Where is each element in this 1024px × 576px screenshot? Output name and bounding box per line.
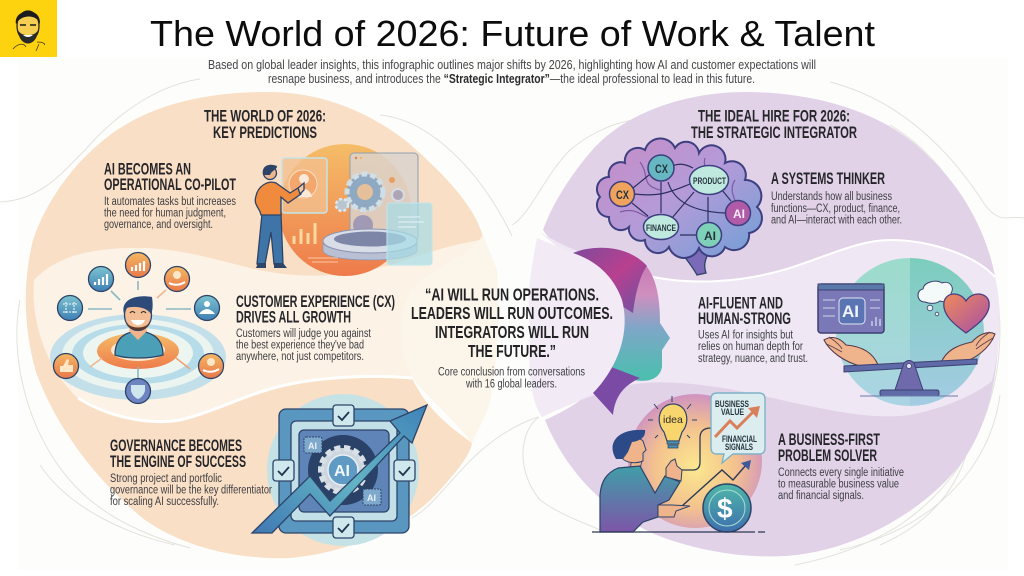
panel: key predictions	[26, 92, 483, 558]
heading: ideal hire: THE IDEAL HIRE FOR 2026:	[698, 108, 850, 126]
title: The World of 2026: Future of Work & Talent	[150, 13, 875, 54]
text block: AI-fluent and human-strong: HUMAN-STRONG	[698, 310, 791, 328]
icon: blue waves	[58, 296, 82, 320]
icon: heart	[944, 294, 989, 333]
icon: orange hand	[164, 266, 190, 292]
figure: smiling customer	[115, 296, 163, 358]
card: business value and financial signals: VALUE	[721, 407, 744, 417]
text block: customer experience	[236, 293, 395, 363]
quote source: Core conclusion from conversations	[438, 367, 585, 379]
quote text	[411, 285, 613, 361]
text block: AI-fluent and human-strong: strategy, nuance, and trust.	[698, 353, 808, 365]
quote source	[438, 367, 585, 390]
icons: checkboxes	[273, 405, 415, 538]
illustration: AI governance engine with growth arrow	[252, 394, 427, 546]
illustration: customer at center with orbiting icons	[50, 252, 226, 404]
arrow: financial growth	[682, 465, 746, 506]
arrows: outward from customer	[88, 281, 191, 379]
node: CX teal	[648, 155, 674, 181]
text block: governance: for scaling AI successfully.	[110, 496, 219, 508]
icon: right hand	[941, 332, 995, 364]
text block: AI-fluent and human-strong: relies on human depth for	[698, 341, 803, 353]
text block: AI co-pilot	[104, 160, 236, 231]
illustration: balance of AI and human heart	[818, 258, 995, 406]
icon: blue chart	[88, 266, 114, 292]
node: finance	[644, 214, 678, 240]
quote text: “AI WILL RUN OPERATIONS.	[425, 285, 599, 305]
illustration: person with AI holograms	[255, 144, 432, 276]
node: product: PRODUCT	[693, 176, 726, 187]
icon: AI gear: AI	[334, 463, 350, 480]
panel background: lilac blob	[543, 92, 999, 556]
icon: blue group	[194, 296, 220, 320]
heading: ideal hire	[691, 108, 857, 142]
icon: AI chip bottom: AI	[367, 493, 376, 503]
text block: AI co-pilot: It automates tasks but increases	[104, 196, 236, 208]
text block: systems thinker: A SYSTEMS THINKER	[771, 170, 885, 188]
arrows: brain connections	[632, 164, 731, 235]
text block: business-first: A BUSINESS-FIRST	[778, 431, 880, 449]
icon: thumbs up	[54, 354, 78, 378]
text block: AI co-pilot: governance, and oversight.	[104, 219, 213, 231]
ground line	[592, 531, 765, 533]
node: finance: FINANCE	[646, 223, 676, 234]
node: AI green: AI	[704, 229, 716, 243]
text block: business-first	[778, 431, 904, 502]
icon: shield	[126, 378, 150, 404]
icon: thought cloud	[918, 281, 952, 316]
node: product	[690, 166, 728, 194]
text block: AI co-pilot: AI BECOMES AN	[104, 160, 191, 178]
heading: key predictions: THE WORLD OF 2026:	[204, 108, 326, 126]
text block: governance: THE ENGINE OF SUCCESS	[110, 453, 246, 471]
card: business value and financial signals: FINANCIAL	[722, 434, 757, 444]
icon: AI chip top: AI	[308, 441, 317, 451]
text block: systems thinker: and AI—interact with each other.	[771, 214, 902, 226]
icon: scale	[844, 359, 977, 396]
heading: key predictions: KEY PREDICTIONS	[213, 124, 317, 142]
text block: governance: governance will be the key differentiator	[110, 484, 272, 496]
text block: customer experience: the best experience they've bad	[236, 340, 364, 352]
icon: AI chip top	[304, 437, 322, 453]
node: CX orange	[610, 182, 634, 206]
illustration: brain network	[597, 138, 762, 275]
icon: AI gear	[321, 448, 365, 492]
subtitle	[208, 58, 816, 86]
node: AI purple: AI	[733, 207, 745, 221]
card: business value and financial signals: SIGNALS	[725, 442, 753, 452]
text block: governance	[110, 437, 272, 508]
icon: dollar coin: $	[717, 493, 733, 524]
arrow: growth	[252, 405, 427, 533]
node: AI green	[696, 222, 722, 248]
figure: man pointing	[255, 165, 304, 268]
text block: systems thinker: Understands how all business	[771, 191, 892, 203]
icon: orange bars	[126, 252, 150, 278]
icon: light bulb: idea	[663, 414, 683, 426]
text block: governance: Strong project and portfolic	[110, 473, 222, 485]
figure: man with idea	[600, 430, 690, 532]
text block: systems thinker	[771, 170, 902, 226]
quote source: with 16 global leaders.	[465, 378, 557, 390]
icon: AI screen	[818, 284, 884, 333]
panel: ideal hire	[540, 92, 1000, 556]
heading: key predictions	[204, 108, 326, 142]
illustration: human head silhouette	[573, 248, 670, 415]
panel band: AI-fluent	[540, 232, 1000, 416]
quote bubble	[401, 235, 625, 443]
logo: yellow avatar badge	[0, 0, 57, 57]
text block: AI-fluent and human-strong	[698, 294, 808, 365]
node: CX teal: CX	[655, 162, 668, 176]
text block: customer experience: DRIVES ALL GROWTH	[236, 308, 351, 326]
text block: systems thinker: functions—CX, product, finance,	[771, 203, 900, 215]
text block: customer experience: Customers will judge you against	[236, 328, 372, 340]
heading: ideal hire: THE STRATEGIC INTEGRATOR	[691, 124, 857, 142]
text block: governance: GOVERNANCE BECOMES	[110, 437, 242, 455]
text block: AI-fluent and human-strong: Uses AI for insights but	[698, 330, 794, 342]
text block: business-first: and financial signals.	[778, 490, 864, 502]
text block: business-first: PROBLEM SOLVER	[778, 447, 877, 465]
card: business value and financial signals: BUSINESS	[715, 399, 749, 409]
quote text: INTEGRATORS WILL RUN	[435, 322, 589, 342]
icon: gears	[336, 174, 404, 235]
text block: AI co-pilot: OPERATIONAL CO-PILOT	[104, 176, 236, 194]
callout: central quote	[401, 235, 625, 443]
node: CX orange: CX	[616, 188, 629, 202]
card: business value and financial signals	[711, 393, 765, 463]
subtitle: resnape business, and introduces the “Strategic Integrator”—the ideal professional to lead in this future.	[268, 72, 755, 86]
node: AI purple	[726, 200, 750, 226]
quote text: THE FUTURE.”	[468, 341, 556, 361]
text block: business-first: Connects every single initiative	[778, 467, 904, 479]
wire: idea to value	[680, 428, 711, 470]
icon: AI screen: AI	[842, 302, 859, 321]
quote text: LEADERS WILL RUN OUTCOMES.	[411, 303, 613, 323]
panel background: peach blob	[26, 92, 483, 558]
icon: light bulb	[648, 396, 697, 448]
subtitle: Based on global leader insights, this infographic outlines major shifts by 2026, highlighting how AI and customer expectations will	[208, 58, 816, 72]
text block: AI co-pilot: the need for human judgment,	[104, 208, 226, 220]
text block: customer experience: anywhere, not just competitors.	[236, 351, 364, 363]
illustration: problem solver with idea and value	[592, 393, 765, 532]
icon: left hand	[824, 337, 878, 366]
icon: dollar coin	[703, 484, 751, 532]
text block: customer experience: CUSTOMER EXPERIENCE (CX)	[236, 293, 395, 311]
text block: business-first: to measurable business value	[778, 478, 899, 490]
text block: AI-fluent and human-strong: AI-FLUENT AND	[698, 294, 783, 312]
icon: orange support	[198, 354, 224, 378]
panel band: customer experience	[33, 240, 481, 422]
icon: AI chip bottom	[363, 489, 381, 505]
